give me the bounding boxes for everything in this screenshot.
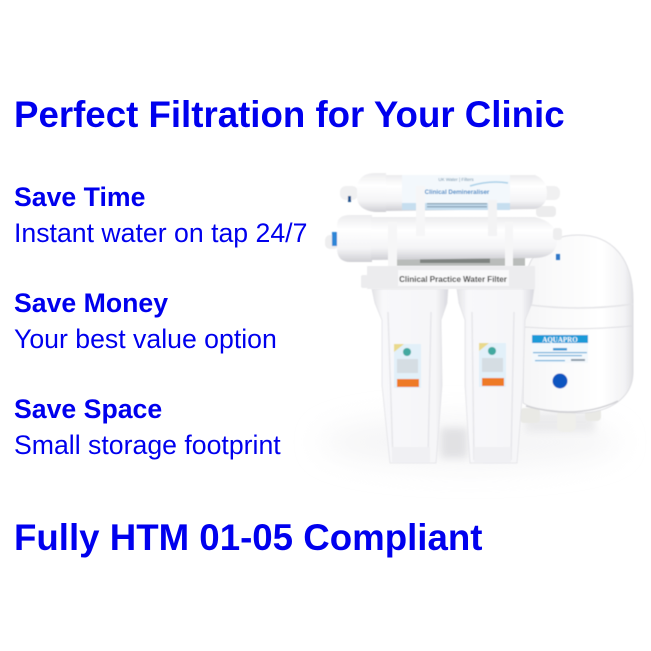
demineraliser label [402,175,510,236]
benefit: save money: Save Money [14,288,168,318]
demineraliser label: UK Water | Filters [438,177,474,182]
bracket with product name: Clinical Practice Water Filter [399,275,507,284]
benefit: save time: Instant water on tap 24/7 [14,218,307,248]
benefit: save time: Save Time [14,182,145,212]
benefit: save money: Your best value option [14,324,277,354]
lower membrane cartridge [325,215,562,270]
benefit: save money [14,288,277,354]
left filter housing [372,289,448,463]
bracket with product name [361,266,535,289]
demineraliser label: Clinical Demineraliser [425,189,490,196]
right filter sticker [479,343,506,387]
tank valve [552,374,568,388]
benefit: save space: Small storage footprint [14,430,281,460]
upper demineraliser cartridge [340,173,560,236]
benefit: save space: Save Space [14,394,162,424]
right filter housing [457,289,534,463]
floor shadow [320,412,620,468]
benefit: save time [14,182,307,248]
compliance statement: Fully HTM 01-05 Compliant [14,517,482,558]
left filter sticker [394,344,421,388]
title: Perfect Filtration for Your Clinic [14,94,565,135]
benefit: save space [14,394,281,460]
tank label [532,335,588,363]
storage tank [520,235,633,432]
tank label: AQUAPRO [542,336,578,344]
tank feet [520,408,601,432]
